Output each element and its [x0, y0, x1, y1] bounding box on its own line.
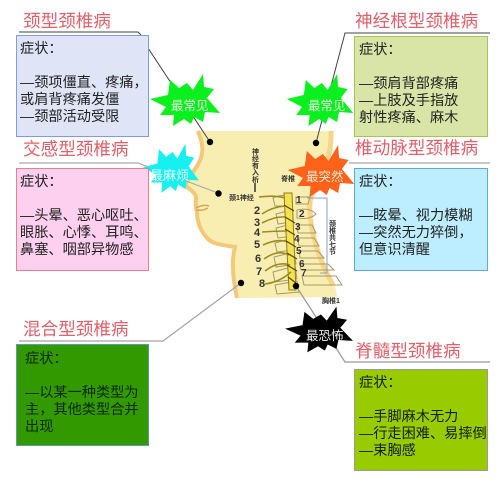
illustration: vertebra numbers: 4: [294, 234, 300, 245]
illustration: vertebra numbers: [254, 195, 307, 290]
illustration: vertebra numbers: 7: [301, 268, 307, 279]
panel: nerve root type symptoms: 症状： —颈肩背部疼痛 —上肢及手指放 射性疼痛、麻木: [359, 42, 458, 126]
badge: most common left: [150, 74, 220, 126]
panel: vertebral artery type symptoms: [354, 168, 488, 271]
leader line: mixed type: [19, 283, 241, 341]
illustration: vertebra numbers: 6: [299, 259, 305, 270]
heading: vertebral artery type: 椎动脉型颈椎病: [355, 138, 478, 158]
illustration: vertebra numbers: 3: [254, 217, 260, 229]
illustration: spinal nerves: [259, 196, 291, 284]
panel: myelopathy type symptoms: 症状： —手脚麻木无力 —行走困难、易摔倒 —束胸感: [359, 375, 487, 459]
illustration: anatomical labels: 脊椎: [281, 174, 295, 183]
illustration: vertebra numbers: 2: [254, 205, 260, 217]
illustration: vertebra numbers: 1: [296, 195, 302, 206]
illustration: spinal cord chevrons: [284, 205, 297, 283]
heading: neck type: 颈型颈椎病: [23, 11, 111, 31]
illustration: vertebra numbers: 4: [254, 227, 261, 239]
illustration: vertebra numbers: 7: [256, 266, 262, 278]
illustration: spinal cord: [284, 193, 296, 290]
heading: myelopathy type: 脊髓型颈椎病: [355, 341, 461, 361]
panel: vertebral artery type symptoms: 症状： —眩晕、视力模糊 —突然无力猝倒， 但意识清醒: [359, 174, 473, 258]
badge: most common left: 最常见: [171, 99, 209, 113]
badge: most troublesome: 最麻烦: [150, 168, 189, 183]
badge: most sudden: 最突然: [306, 169, 344, 184]
illustration: anatomical labels: 神经有入析: [252, 147, 259, 184]
panel: sympathetic type symptoms: 症状： —头晕、恶心呕吐、 眼胀、心悸、耳鸣、 鼻塞、咽部异物感: [20, 174, 148, 258]
leader line: nerve root type: [316, 33, 490, 143]
illustration: vertebra numbers: 3: [295, 222, 301, 233]
badge: most troublesome: [143, 144, 199, 193]
heading: sympathetic type: 交感型颈椎病: [23, 139, 129, 159]
illustration: vertebra numbers: 8: [259, 278, 265, 290]
badge: most common right: [287, 74, 353, 126]
illustration: vertebra bracket: [307, 198, 327, 273]
badge: most terrifying: [285, 307, 353, 352]
leader dots: [207, 139, 319, 289]
panel: neck type symptoms: 症状： —颈项僵直、疼痛， 或肩背疼痛发僵 —颈部活动受限: [20, 41, 148, 125]
illustration: vertebra numbers: 6: [255, 253, 261, 265]
illustration: arrow to nerve opening: [254, 183, 256, 192]
illustration: anatomical labels: 颈1神经: [229, 193, 254, 202]
illustration: vertebra numbers: 5: [296, 246, 302, 257]
badge: most common right: 最常见: [308, 99, 346, 113]
heading: mixed type: 混合型颈椎病: [23, 319, 129, 339]
badge: most sudden: [288, 145, 354, 197]
panel: nerve root type symptoms: [354, 36, 488, 137]
leader line: vertebral artery type: [349, 162, 490, 164]
illustration: vertebra numbers: 2: [299, 209, 305, 220]
illustration: vertebra numbers: 5: [254, 239, 260, 251]
heading: nerve root type: 神经根型颈椎病: [355, 11, 478, 31]
leader line: myelopathy type: [296, 286, 490, 362]
illustration: anatomical labels: 颈椎共七节: [328, 220, 336, 256]
illustration: anatomical labels: [229, 147, 340, 305]
illustration: anatomical labels: 胸椎1: [322, 296, 340, 305]
illustration: head and neck profile: [185, 131, 337, 298]
leader line: sympathetic type: [19, 163, 218, 193]
panel: mixed type symptoms: 症状： —以某一种类型为 主，其他类型合并 出现: [25, 351, 139, 435]
leader line: neck type: [19, 32, 210, 142]
badge: most terrifying: 最恐怖: [306, 328, 344, 343]
illustration: cervical vertebrae: [273, 196, 342, 294]
